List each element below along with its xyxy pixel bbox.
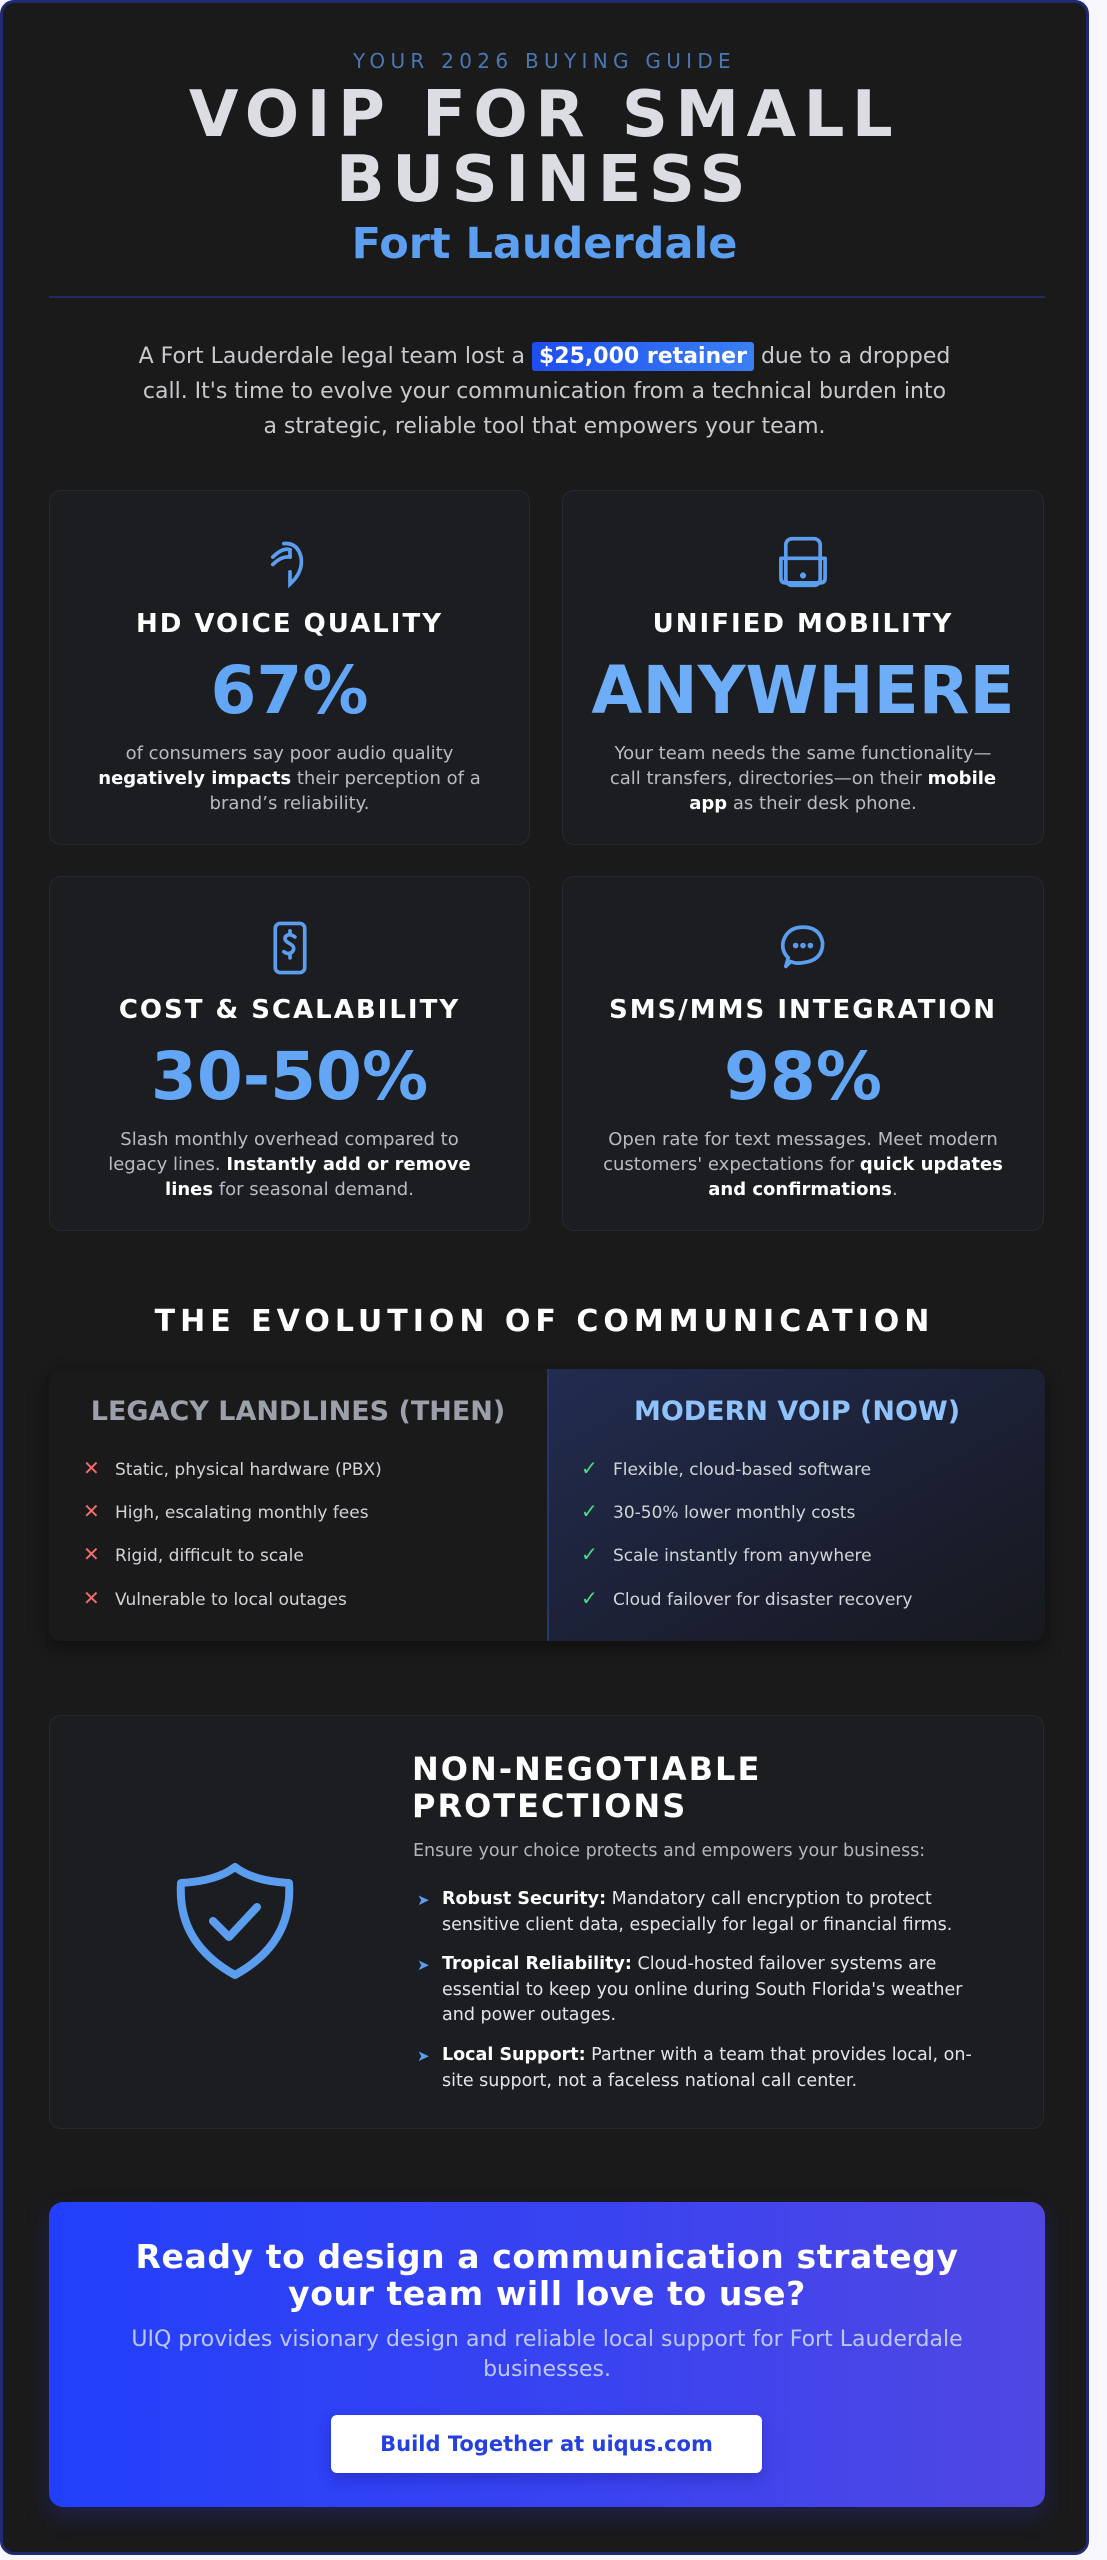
heading: protections bbox=[412, 1750, 761, 1825]
description: of consumers say poor audio quality negatively impacts their perception of a brand’s reliability. bbox=[98, 743, 481, 814]
icon: device bbox=[779, 536, 827, 588]
description: Your team needs the same functionality—call transfers, directories—on their mobile app as their desk phone. bbox=[610, 743, 996, 814]
section heading: evolution: THE EVOLUTION OF COMMUNICATION bbox=[155, 1304, 934, 1339]
title bbox=[189, 78, 900, 217]
bullet: security: Robust Security: Mandatory call encryption to protect sensitive client data, especially for legal or financial firms. bbox=[442, 1889, 952, 1934]
stat: ANYWHERE bbox=[591, 652, 1015, 729]
panel: protections bbox=[49, 1715, 1044, 2129]
column: modern: Scale instantly from anywhere bbox=[613, 1546, 872, 1566]
bullet: security: ➤ bbox=[417, 1891, 430, 1909]
CTA heading: your team will love to use? bbox=[288, 2274, 806, 2313]
card: cost bbox=[49, 876, 530, 1231]
heading: SMS/MMS INTEGRATION bbox=[609, 995, 997, 1025]
CTA text: UIQ provides visionary design and reliable local support for Fort Lauderdale businesses. bbox=[131, 2327, 963, 2382]
bullet: support: ➤ bbox=[417, 2047, 430, 2065]
CTA heading bbox=[135, 2237, 959, 2313]
kicker: YOUR 2026 BUYING GUIDE bbox=[353, 49, 736, 73]
column: modern: ✓ bbox=[581, 1542, 598, 1566]
CTA button: Build Together at uiqus.com bbox=[380, 2432, 713, 2456]
comparison panel bbox=[49, 1369, 1045, 1641]
column: legacy: ✕ bbox=[83, 1499, 100, 1523]
icon: chat bubble bbox=[780, 925, 824, 968]
CTA panel bbox=[49, 2202, 1045, 2507]
CTA heading: Ready to design a communication strategy bbox=[135, 2237, 959, 2276]
subtitle: city: Fort Lauderdale bbox=[352, 219, 737, 269]
column: modern: Cloud failover for disaster recovery bbox=[613, 1590, 912, 1610]
icon: ear bbox=[270, 542, 304, 588]
heading: protections: PROTECTIONS bbox=[412, 1787, 687, 1825]
intro text: A Fort Lauderdale legal team lost a $25,000 retainer due to a dropped call. It's time to evolve your communication from a technical burden into a strategic, reliable tool that empowers your team. bbox=[139, 344, 950, 439]
icon: phone dollar bbox=[273, 922, 307, 974]
bullet: reliability: Tropical Reliability: Cloud-hosted failover systems are essential to keep you online during South Florida's weather and power outages. bbox=[442, 1954, 962, 2025]
title: BUSINESS bbox=[336, 143, 753, 217]
column: modern: ✓ bbox=[581, 1456, 598, 1480]
card: unified mobility bbox=[562, 490, 1044, 845]
icon: shield bbox=[176, 1862, 294, 1979]
column: legacy: High, escalating monthly fees bbox=[115, 1503, 369, 1523]
CTA button bbox=[331, 2415, 762, 2473]
heading: COST & SCALABILITY bbox=[119, 995, 460, 1025]
stat: 98% bbox=[724, 1038, 882, 1115]
column: legacy bbox=[83, 1396, 505, 1610]
bullet: reliability: ➤ bbox=[417, 1956, 430, 1974]
column: modern: ✓ bbox=[581, 1499, 598, 1523]
column: legacy: ✕ bbox=[83, 1456, 100, 1480]
column: legacy: Vulnerable to local outages bbox=[115, 1590, 347, 1610]
heading: modern: MODERN VOIP (NOW) bbox=[634, 1396, 960, 1427]
column: modern: Flexible, cloud-based software bbox=[613, 1460, 871, 1480]
column: legacy: ✕ bbox=[83, 1542, 100, 1566]
bullet: support: Local Support: Partner with a team that provides local, on-site support, not a faceless national call center. bbox=[442, 2045, 972, 2090]
column: modern: 30-50% lower monthly costs bbox=[613, 1503, 855, 1523]
description: Open rate for text messages. Meet modern customers' expectations for quick updates and confirmations. bbox=[603, 1129, 1003, 1200]
heading: UNIFIED MOBILITY bbox=[653, 609, 953, 639]
description: Slash monthly overhead compared to legacy lines. Instantly add or remove lines for seasonal demand. bbox=[108, 1129, 471, 1200]
protections intro: Ensure your choice protects and empowers your business: bbox=[413, 1841, 925, 1861]
column: modern bbox=[547, 1369, 1045, 1641]
column: legacy: ✕ bbox=[83, 1586, 100, 1610]
heading: legacy: LEGACY LANDLINES (THEN) bbox=[91, 1396, 505, 1427]
card: SMS bbox=[562, 876, 1044, 1231]
column: legacy: Static, physical hardware (PBX) bbox=[115, 1460, 382, 1480]
stat: 30-50% bbox=[151, 1038, 428, 1115]
column: modern: ✓ bbox=[581, 1586, 598, 1610]
stat: 67% bbox=[210, 652, 368, 729]
title: VOIP FOR SMALL bbox=[189, 78, 900, 152]
card: HD voice bbox=[49, 490, 530, 845]
heading: HD VOICE QUALITY bbox=[136, 609, 443, 639]
heading: protections: NON-NEGOTIABLE bbox=[412, 1750, 761, 1788]
column: legacy: Rigid, difficult to scale bbox=[115, 1546, 304, 1566]
